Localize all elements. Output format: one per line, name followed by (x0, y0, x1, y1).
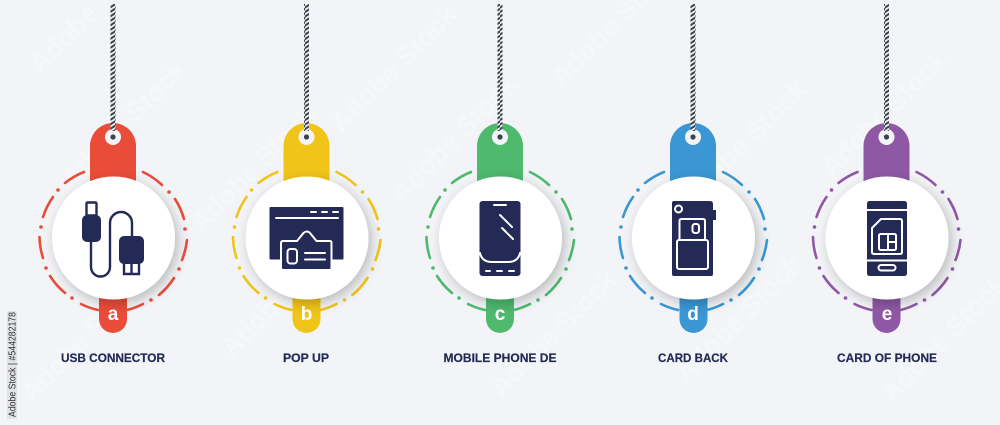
icon: sim card phone (867, 201, 907, 276)
stock credit text: Adobe Stock | #544282178 (6, 312, 18, 417)
label a: USB CONNECTOR (61, 351, 165, 365)
label c: MOBILE PHONE DE (444, 351, 556, 365)
watermarks: Adobe Stock (325, 0, 463, 138)
dashed ring c (426, 172, 574, 310)
dashed ring d (619, 172, 767, 310)
white circle d (632, 176, 755, 300)
panel: c mobile phone de (426, 4, 574, 365)
icon: mobile phone (480, 201, 520, 276)
watermarks: Adobe Stock (55, 54, 193, 193)
panel: e card of phone (813, 4, 960, 365)
panel: b pop up (233, 4, 380, 365)
letter c: c (495, 304, 506, 325)
watermarks: Adobe Stock (15, 269, 153, 408)
tag e (864, 123, 910, 333)
icon: usb cable (82, 202, 144, 276)
watermarks: Adobe Stock (215, 224, 353, 363)
tag c (477, 123, 523, 333)
dashed ring e (813, 172, 960, 310)
watermarks: Adobe (23, 0, 104, 79)
label d: CARD BACK (658, 351, 728, 365)
watermarks: Adobe Stock (815, 44, 953, 183)
panel: d card back (619, 4, 767, 365)
white circle b (246, 176, 368, 300)
watermarks: Adobe Stock (670, 249, 808, 388)
hanging rope a (110, 4, 116, 131)
hanging rope e (884, 4, 889, 131)
watermarks: Adobe Stock (185, 99, 323, 238)
hanging rope d (690, 4, 696, 131)
dashed ring b (233, 172, 380, 310)
watermarks: Adobe Stock (385, 69, 523, 208)
watermarks: Adobe Stock (675, 74, 813, 213)
white circle e (826, 176, 948, 300)
dashed ring a (39, 172, 187, 310)
tag d (670, 123, 716, 333)
letter a: a (108, 304, 119, 325)
letter d: d (687, 304, 699, 325)
tag b (284, 123, 330, 333)
watermarks: Adobe Stock (485, 264, 623, 403)
icon: pop up window (270, 207, 344, 270)
icon: phone card back (672, 201, 716, 276)
letter e: e (882, 304, 892, 325)
letter b: b (301, 304, 312, 325)
hanging rope c (498, 4, 502, 131)
label e: CARD OF PHONE (837, 351, 937, 365)
panel: a usb connector (39, 4, 187, 365)
white circle a (52, 176, 175, 300)
tag a (90, 123, 136, 333)
hanging rope b (304, 4, 309, 131)
label b: POP UP (283, 351, 329, 365)
white circle c (439, 176, 562, 300)
